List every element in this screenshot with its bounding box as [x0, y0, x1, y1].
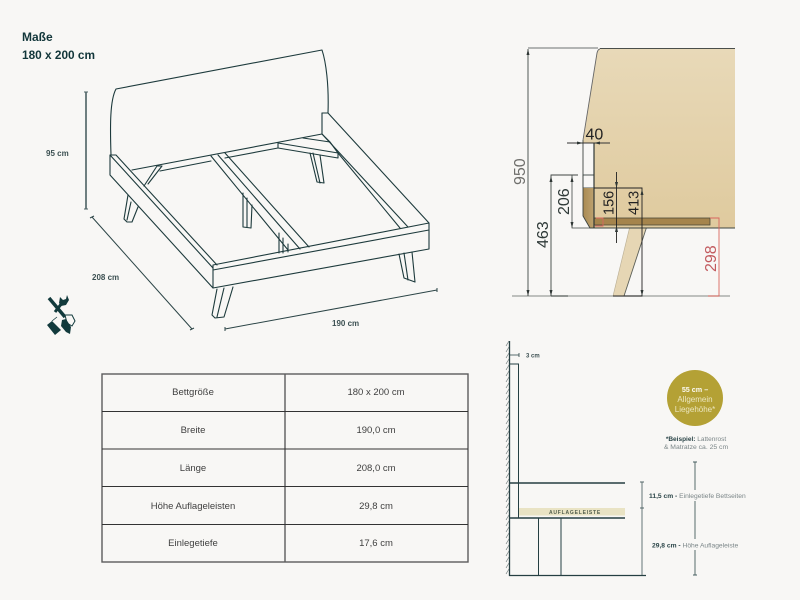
dimension 156: 156	[602, 191, 618, 215]
leg: center	[243, 193, 252, 228]
dimension 950: 950	[512, 158, 529, 185]
dimension 413	[594, 188, 644, 296]
headboard	[111, 50, 328, 155]
dimensions table: Länge	[180, 463, 206, 474]
leg	[613, 226, 647, 296]
center beam	[211, 153, 309, 250]
callout: lying height	[667, 370, 723, 426]
dimensions table: Höhe Auflageleisten	[151, 501, 235, 512]
right side rail	[322, 113, 429, 228]
left side rail	[110, 155, 217, 288]
rail cross section	[583, 188, 594, 228]
note	[664, 436, 728, 451]
3 cm label	[509, 353, 540, 360]
front rail	[213, 223, 429, 288]
support strip: AUFLAGELEISTE	[549, 510, 601, 516]
callout: lying height: 55 cm –	[682, 385, 708, 394]
vertical measure with labels: 11,5 cm - Einlegetiefe Bettseiten	[649, 493, 746, 500]
bed frame drawing	[110, 50, 429, 318]
dimension: length 208 cm	[90, 216, 194, 330]
note: & Matratze ca. 25 cm	[664, 444, 728, 451]
dimension 413: 413	[626, 191, 642, 215]
dimension: length 208 cm: 208 cm	[92, 273, 119, 282]
dimension 950	[512, 48, 598, 296]
head rail	[132, 134, 322, 171]
cross-section diagram	[506, 341, 646, 576]
title	[22, 30, 95, 62]
leg: back left	[124, 195, 138, 222]
dimension 40	[567, 126, 610, 144]
dimensions table: 29,8 cm	[359, 501, 393, 512]
dimension 463	[535, 175, 578, 296]
dimension 463: 463	[535, 221, 552, 248]
3 cm label: 3 cm	[526, 354, 540, 360]
headboard panel	[583, 49, 735, 228]
dimensions table: Einlegetiefe	[168, 538, 218, 549]
dimension 206: 206	[556, 188, 573, 215]
dimensions table: 190,0 cm	[356, 425, 396, 436]
support strip	[519, 508, 625, 516]
dimensions table: 208,0 cm	[356, 463, 396, 474]
callout: lying height: Liegehöhe*	[675, 405, 715, 414]
dimension: width 190 cm: 190 cm	[332, 319, 359, 328]
callout: lying height: Allgemein	[677, 395, 713, 404]
dimension 206	[556, 175, 590, 228]
side rail white	[583, 143, 594, 175]
dimension: height 95 cm	[46, 92, 88, 209]
dimension: height 95 cm: 95 cm	[46, 149, 69, 158]
vertical measure with labels	[649, 462, 746, 575]
bracket	[278, 113, 338, 158]
dimensions table: Bettgröße	[172, 387, 214, 398]
brace left	[144, 166, 162, 186]
dimension 298: 298	[703, 245, 720, 272]
dimension 40: 40	[586, 126, 603, 144]
leg: back right	[310, 153, 324, 183]
title: Maße	[22, 30, 53, 44]
vertical measure with labels: 29,8 cm - Höhe Auflageleiste	[652, 542, 739, 550]
dimensions table: 17,6 cm	[359, 538, 393, 549]
wall hatching	[506, 341, 509, 574]
leg: front center	[279, 233, 288, 253]
icon: hand with wrench	[47, 295, 75, 335]
slat	[594, 218, 710, 225]
dimension 156	[602, 172, 618, 243]
side section drawing	[512, 48, 735, 296]
side dimension	[640, 482, 644, 575]
leg: front right	[399, 252, 415, 282]
title: 180 x 200 cm	[22, 48, 95, 62]
dimension 298	[595, 218, 720, 296]
dimensions table	[102, 374, 468, 562]
wall and bed lines	[510, 341, 646, 576]
leg: front left	[212, 287, 233, 318]
dimension: width 190 cm	[225, 288, 437, 331]
ground line	[512, 295, 730, 297]
note: *Beispiel: Lattenrost	[666, 436, 726, 443]
dimensions table: 180 x 200 cm	[347, 387, 405, 398]
dimensions table: Breite	[181, 425, 205, 436]
